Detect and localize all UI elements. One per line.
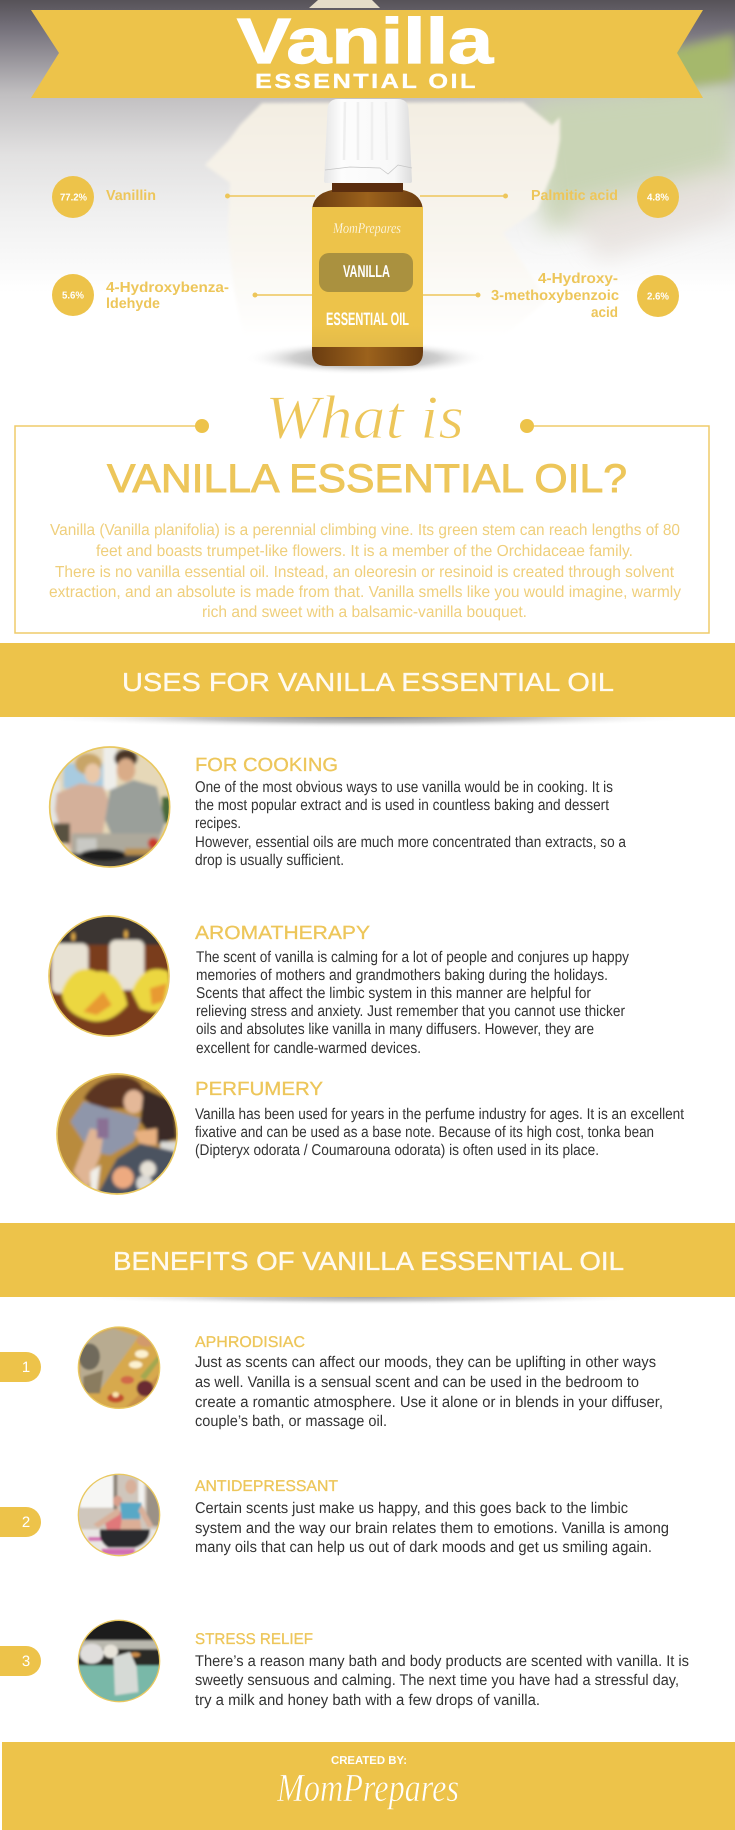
text block: stress relief: STRESS RELIEF <box>195 1631 313 1648</box>
text block: aromatherapy: excellent for candle-warmed devices. <box>196 1040 421 1057</box>
text block: aromatherapy: relieving stress and anxiety. Just remember that you cannot use thicker <box>196 1003 625 1020</box>
photo: candles and flowers <box>48 915 170 1037</box>
footer <box>2 1742 735 1830</box>
section header: benefits: BENEFITS OF VANILLA ESSENTIAL OIL <box>113 1246 624 1276</box>
compound: Palmitic acid 4.8% <box>531 176 679 218</box>
compound: 4-Hydroxy-3-methoxybenzoic acid 2.6%: 4-Hydroxy- <box>538 271 618 287</box>
text block: aphrodisiac: create a romantic atmosphere. Use it alone or in blends in your diffuser, <box>195 1394 663 1411</box>
text block: aphrodisiac: as well. Vanilla is a sensual scent and can be used in the bedroom to <box>195 1374 639 1391</box>
text block: perfumery: (Dipteryx odorata / Coumarouna odorata) is often used in its place. <box>195 1142 599 1159</box>
text block: stress relief: There’s a reason many bath and body products are scented with vanilla. It is <box>195 1653 689 1670</box>
panel: what is <box>15 384 709 633</box>
number tab 3 <box>0 1646 41 1676</box>
title: Vanilla: Vanilla <box>237 5 494 77</box>
text block: for cooking: However, essential oils are much more concentrated than extracts, so a <box>195 834 626 851</box>
text block: perfumery <box>195 1079 685 1159</box>
text block: aphrodisiac: couple’s bath, or massage oil. <box>195 1413 387 1430</box>
text block: aphrodisiac: APHRODISIAC <box>195 1334 305 1351</box>
description text: feet and boasts trumpet-like flowers. It is a member of the Orchidaceae family. <box>96 543 633 560</box>
essential oil bottle <box>244 99 488 375</box>
description text: There is no vanilla essential oil. Instead, an oleoresin or resinoid is created through solvent <box>55 564 675 581</box>
text block: for cooking: recipes. <box>195 815 241 832</box>
number tab 3: 3 <box>22 1653 30 1670</box>
text block: aromatherapy: oils and absolutes like vanilla in many diffusers. However, they are <box>196 1021 594 1038</box>
section header: uses: USES FOR VANILLA ESSENTIAL OIL <box>122 667 614 697</box>
text block: antidepressant: many oils that can help us out of dark moods and get us smiling again. <box>195 1539 652 1556</box>
compound: 4-Hydroxy-3-methoxybenzoic acid 2.6%: 2.6% <box>647 292 669 302</box>
text block: antidepressant: ANTIDEPRESSANT <box>195 1478 339 1495</box>
text block: perfumery: PERFUMERY <box>195 1079 323 1100</box>
text block: for cooking <box>195 755 626 869</box>
photo: meditation <box>78 1474 160 1556</box>
text block: antidepressant: Certain scents just make us happy, and this goes back to the limbic <box>195 1500 628 1517</box>
title banner <box>31 5 703 98</box>
footer: CREATED BY: <box>331 1755 407 1767</box>
text block: perfumery: fixative and can be used as a base note. Because of its high cost, tonka bean <box>195 1124 654 1141</box>
bottle label: Vanilla: VANILLA <box>343 262 390 281</box>
compound: Vanillin 77.2%: 77.2% <box>60 192 87 204</box>
photo: towels and candles <box>78 1326 160 1409</box>
text block: for cooking: the most popular extract and is used in countless baking and dessert <box>195 797 610 814</box>
photo: bath <box>78 1620 160 1702</box>
subtitle: Essential Oil: ESSENTIAL OIL <box>255 70 478 93</box>
section header: uses <box>0 643 735 728</box>
heading: Vanilla Essential Oil?: VANILLA ESSENTIAL OIL? <box>107 457 627 501</box>
text block: antidepressant <box>195 1478 669 1556</box>
number tab 2 <box>0 1507 41 1537</box>
number tab 1 <box>0 1352 41 1382</box>
compound: 4-Hydroxybenzaldehyde 5.6%: 5.6% <box>62 290 84 302</box>
bottle label: brand: MomPrepares <box>332 221 401 237</box>
number tab 1: 1 <box>22 1359 30 1376</box>
text block: aromatherapy: AROMATHERAPY <box>195 923 370 944</box>
compound: 4-Hydroxy-3-methoxybenzoic acid 2.6% <box>491 271 679 321</box>
text block: antidepressant: system and the way our brain relates them to emotions. Vanilla is among <box>195 1520 669 1537</box>
heading: What is: What is <box>265 384 464 452</box>
footer: MomPrepares <box>276 1765 459 1810</box>
compound: 4-Hydroxybenzaldehyde 5.6%: 4-Hydroxybenza- <box>106 280 229 296</box>
compound: Palmitic acid 4.8%: Palmitic acid <box>531 188 618 204</box>
description text: extraction, and an absolute is made from that. Vanilla smells like you would imagine, warmly <box>49 584 681 601</box>
text block: for cooking: FOR COOKING <box>195 755 338 776</box>
text block: aphrodisiac: Just as scents can affect our moods, they can be uplifting in other ways <box>195 1354 656 1371</box>
bottle label: Essential Oil: ESSENTIAL OIL <box>326 309 409 329</box>
compound: 4-Hydroxybenzaldehyde 5.6%: ldehyde <box>106 296 160 312</box>
text block: aromatherapy: Scents that affect the limbic system in this manner are helpful for <box>196 985 591 1002</box>
bottle label: name plate <box>319 253 413 292</box>
compound: Vanillin 77.2%: Vanillin <box>106 188 156 204</box>
section header: benefits <box>0 1223 735 1305</box>
photo: couple cooking <box>48 746 170 868</box>
text block: aromatherapy: The scent of vanilla is calming for a lot of people and conjures up happy <box>196 949 629 966</box>
photo: woman with perfume <box>56 1073 178 1195</box>
text block: aphrodisiac <box>195 1334 663 1430</box>
compound: Vanillin 77.2% <box>52 176 156 218</box>
description text: rich and sweet with a balsamic-vanilla bouquet. <box>202 604 527 621</box>
compound: 4-Hydroxy-3-methoxybenzoic acid 2.6%: 3-methoxybenzoic <box>491 288 619 304</box>
text block: for cooking: drop is usually sufficient. <box>195 852 344 869</box>
text block: stress relief <box>195 1631 689 1709</box>
description text: Vanilla (Vanilla planifolia) is a perennial climbing vine. Its green stem can reach lengths of 80 <box>50 522 680 539</box>
compound: Palmitic acid 4.8%: 4.8% <box>647 192 669 204</box>
compound: 4-Hydroxybenzaldehyde 5.6% <box>52 274 229 316</box>
text block: stress relief: sweetly sensuous and calming. The next time you have had a stressful day, <box>195 1672 679 1689</box>
compound: 4-Hydroxy-3-methoxybenzoic acid 2.6%: acid <box>591 305 618 321</box>
hero background: blurred vanilla flower photo <box>0 0 735 289</box>
text block: aromatherapy: memories of mothers and grandmothers baking during the holidays. <box>196 967 608 984</box>
description text <box>49 522 681 621</box>
connector lines <box>225 194 508 298</box>
number tab 2: 2 <box>22 1514 30 1531</box>
text block: stress relief: try a milk and honey bath with a few drops of vanilla. <box>195 1692 540 1709</box>
text block: for cooking: One of the most obvious ways to use vanilla would be in cooking. It is <box>195 779 613 796</box>
text block: aromatherapy <box>195 923 629 1057</box>
